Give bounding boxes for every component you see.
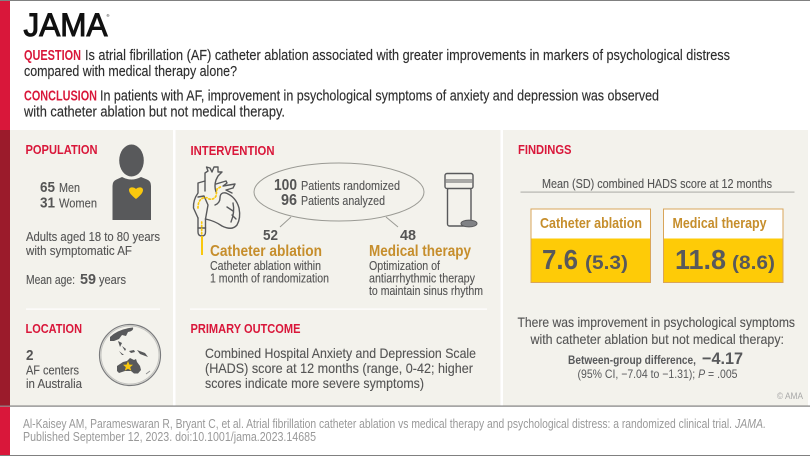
result card: catheter ablation: (5.3)	[585, 253, 628, 274]
result card: medical therapy	[664, 209, 783, 282]
citation footer: JAMA.	[734, 416, 766, 431]
credit: AMA: © AMA	[777, 391, 804, 402]
heading: primary outcome: PRIMARY OUTCOME	[190, 321, 301, 336]
panel: intervention and primary outcome	[176, 130, 500, 406]
text block: between-group difference	[568, 349, 743, 381]
chart: randomization ellipse: 100	[274, 177, 297, 194]
text block: conclusion: CONCLUSION	[24, 88, 97, 104]
text block: sex counts	[40, 180, 97, 212]
icon: catheter	[198, 186, 222, 255]
chart: randomization ellipse	[254, 163, 424, 227]
text block: eligibility: Adults aged 18 to 80 years	[26, 229, 160, 244]
text block: centers: 2	[26, 348, 34, 364]
text block: question: QUESTION	[24, 47, 81, 64]
heading: intervention: INTERVENTION	[190, 143, 274, 158]
text block: primary outcome	[205, 345, 476, 391]
text block: centers	[26, 348, 83, 391]
text block: finding summary	[518, 314, 795, 347]
text block: mean age: 59	[80, 272, 96, 288]
chart: randomization ellipse: Patients randomized	[301, 178, 400, 193]
heading: population: POPULATION	[26, 142, 98, 157]
text block: mean age	[26, 272, 126, 288]
result card: medical therapy: 11.8	[675, 244, 726, 275]
text block: finding summary: with catheter ablation but not medical therapy:	[530, 331, 784, 347]
text block: conclusion	[23, 88, 659, 120]
citation footer: Published September 12, 2023. doi:10.1001/jama.2023.14685	[23, 429, 316, 444]
text block: catheter ablation arm: Catheter ablation	[210, 243, 322, 260]
text block: sex counts: 65	[40, 180, 55, 196]
text block: centers: in Australia	[26, 376, 83, 391]
text block: centers: AF centers	[26, 362, 79, 378]
text block: medical therapy arm: Optimization of	[369, 258, 440, 273]
text block: mean age: Mean age:	[26, 272, 75, 287]
text block: primary outcome: Combined Hospital Anxiety and Depression Scale	[205, 345, 476, 361]
icon: globe with Australia	[100, 324, 160, 386]
chart: randomization ellipse: Patients analyzed	[301, 193, 385, 208]
icon: person with heart	[112, 144, 151, 220]
text block: medical therapy arm: to maintain sinus rhythm	[369, 283, 483, 298]
text block: primary outcome: (HADS) score at 12 months (range, 0-42; higher	[205, 360, 473, 376]
text block: question: compared with medical therapy alone?	[24, 63, 237, 80]
text block: medical therapy arm	[369, 228, 483, 298]
red side bar	[0, 1, 10, 455]
text block: sex counts: Men	[59, 180, 80, 195]
text block: mean age: years	[99, 272, 126, 287]
icon: pill bottle	[445, 174, 477, 227]
panel: findings	[503, 130, 808, 406]
heading: findings: FINDINGS	[518, 142, 572, 157]
heading: location: LOCATION	[26, 321, 82, 336]
text block: catheter ablation arm: Catheter ablation within	[210, 258, 321, 273]
chart: randomization ellipse: 96	[281, 192, 297, 209]
text block: sex counts: 31	[40, 196, 55, 212]
text block: eligibility	[25, 229, 160, 258]
citation footer	[23, 416, 766, 444]
text block: primary outcome: scores indicate more severe symptoms)	[205, 375, 424, 391]
result card: catheter ablation: 7.6	[542, 244, 578, 275]
text block: question	[24, 47, 730, 80]
text block: catheter ablation arm: 52	[263, 228, 278, 244]
text block: between-group difference: −4.17	[702, 349, 743, 368]
icon: heart with catheter	[193, 167, 240, 236]
text block: conclusion: with catheter ablation but not medical therapy.	[23, 104, 285, 120]
text block: sex counts: Women	[59, 196, 97, 210]
logo: JAMA: JAMA	[24, 7, 108, 43]
text block: between-group difference: (95% CI, −7.04 to −1.31); P = .005	[578, 367, 738, 381]
text block: medical therapy arm: antiarrhythmic therapy	[369, 270, 475, 286]
result card: medical therapy: Medical therapy	[672, 215, 767, 232]
result card: catheter ablation: Catheter ablation	[540, 215, 642, 232]
logo: JAMA: ®	[106, 13, 110, 18]
text block: eligibility: with symptomatic AF	[25, 243, 132, 258]
text block: catheter ablation arm: 1 month of randomization	[210, 270, 329, 286]
text block: medical therapy arm: Medical therapy	[369, 243, 471, 260]
text block: catheter ablation arm	[210, 228, 329, 286]
panel: population and location	[10, 130, 173, 406]
text block: medical therapy arm: 48	[400, 228, 416, 244]
result card: medical therapy: (8.6)	[732, 253, 775, 274]
text block: conclusion: In patients with AF, improvement in psychological symptoms of anxiety and depression was observed	[100, 88, 659, 104]
text block: between-group difference: Between-group difference,	[568, 353, 696, 367]
result card: catheter ablation	[531, 209, 650, 282]
